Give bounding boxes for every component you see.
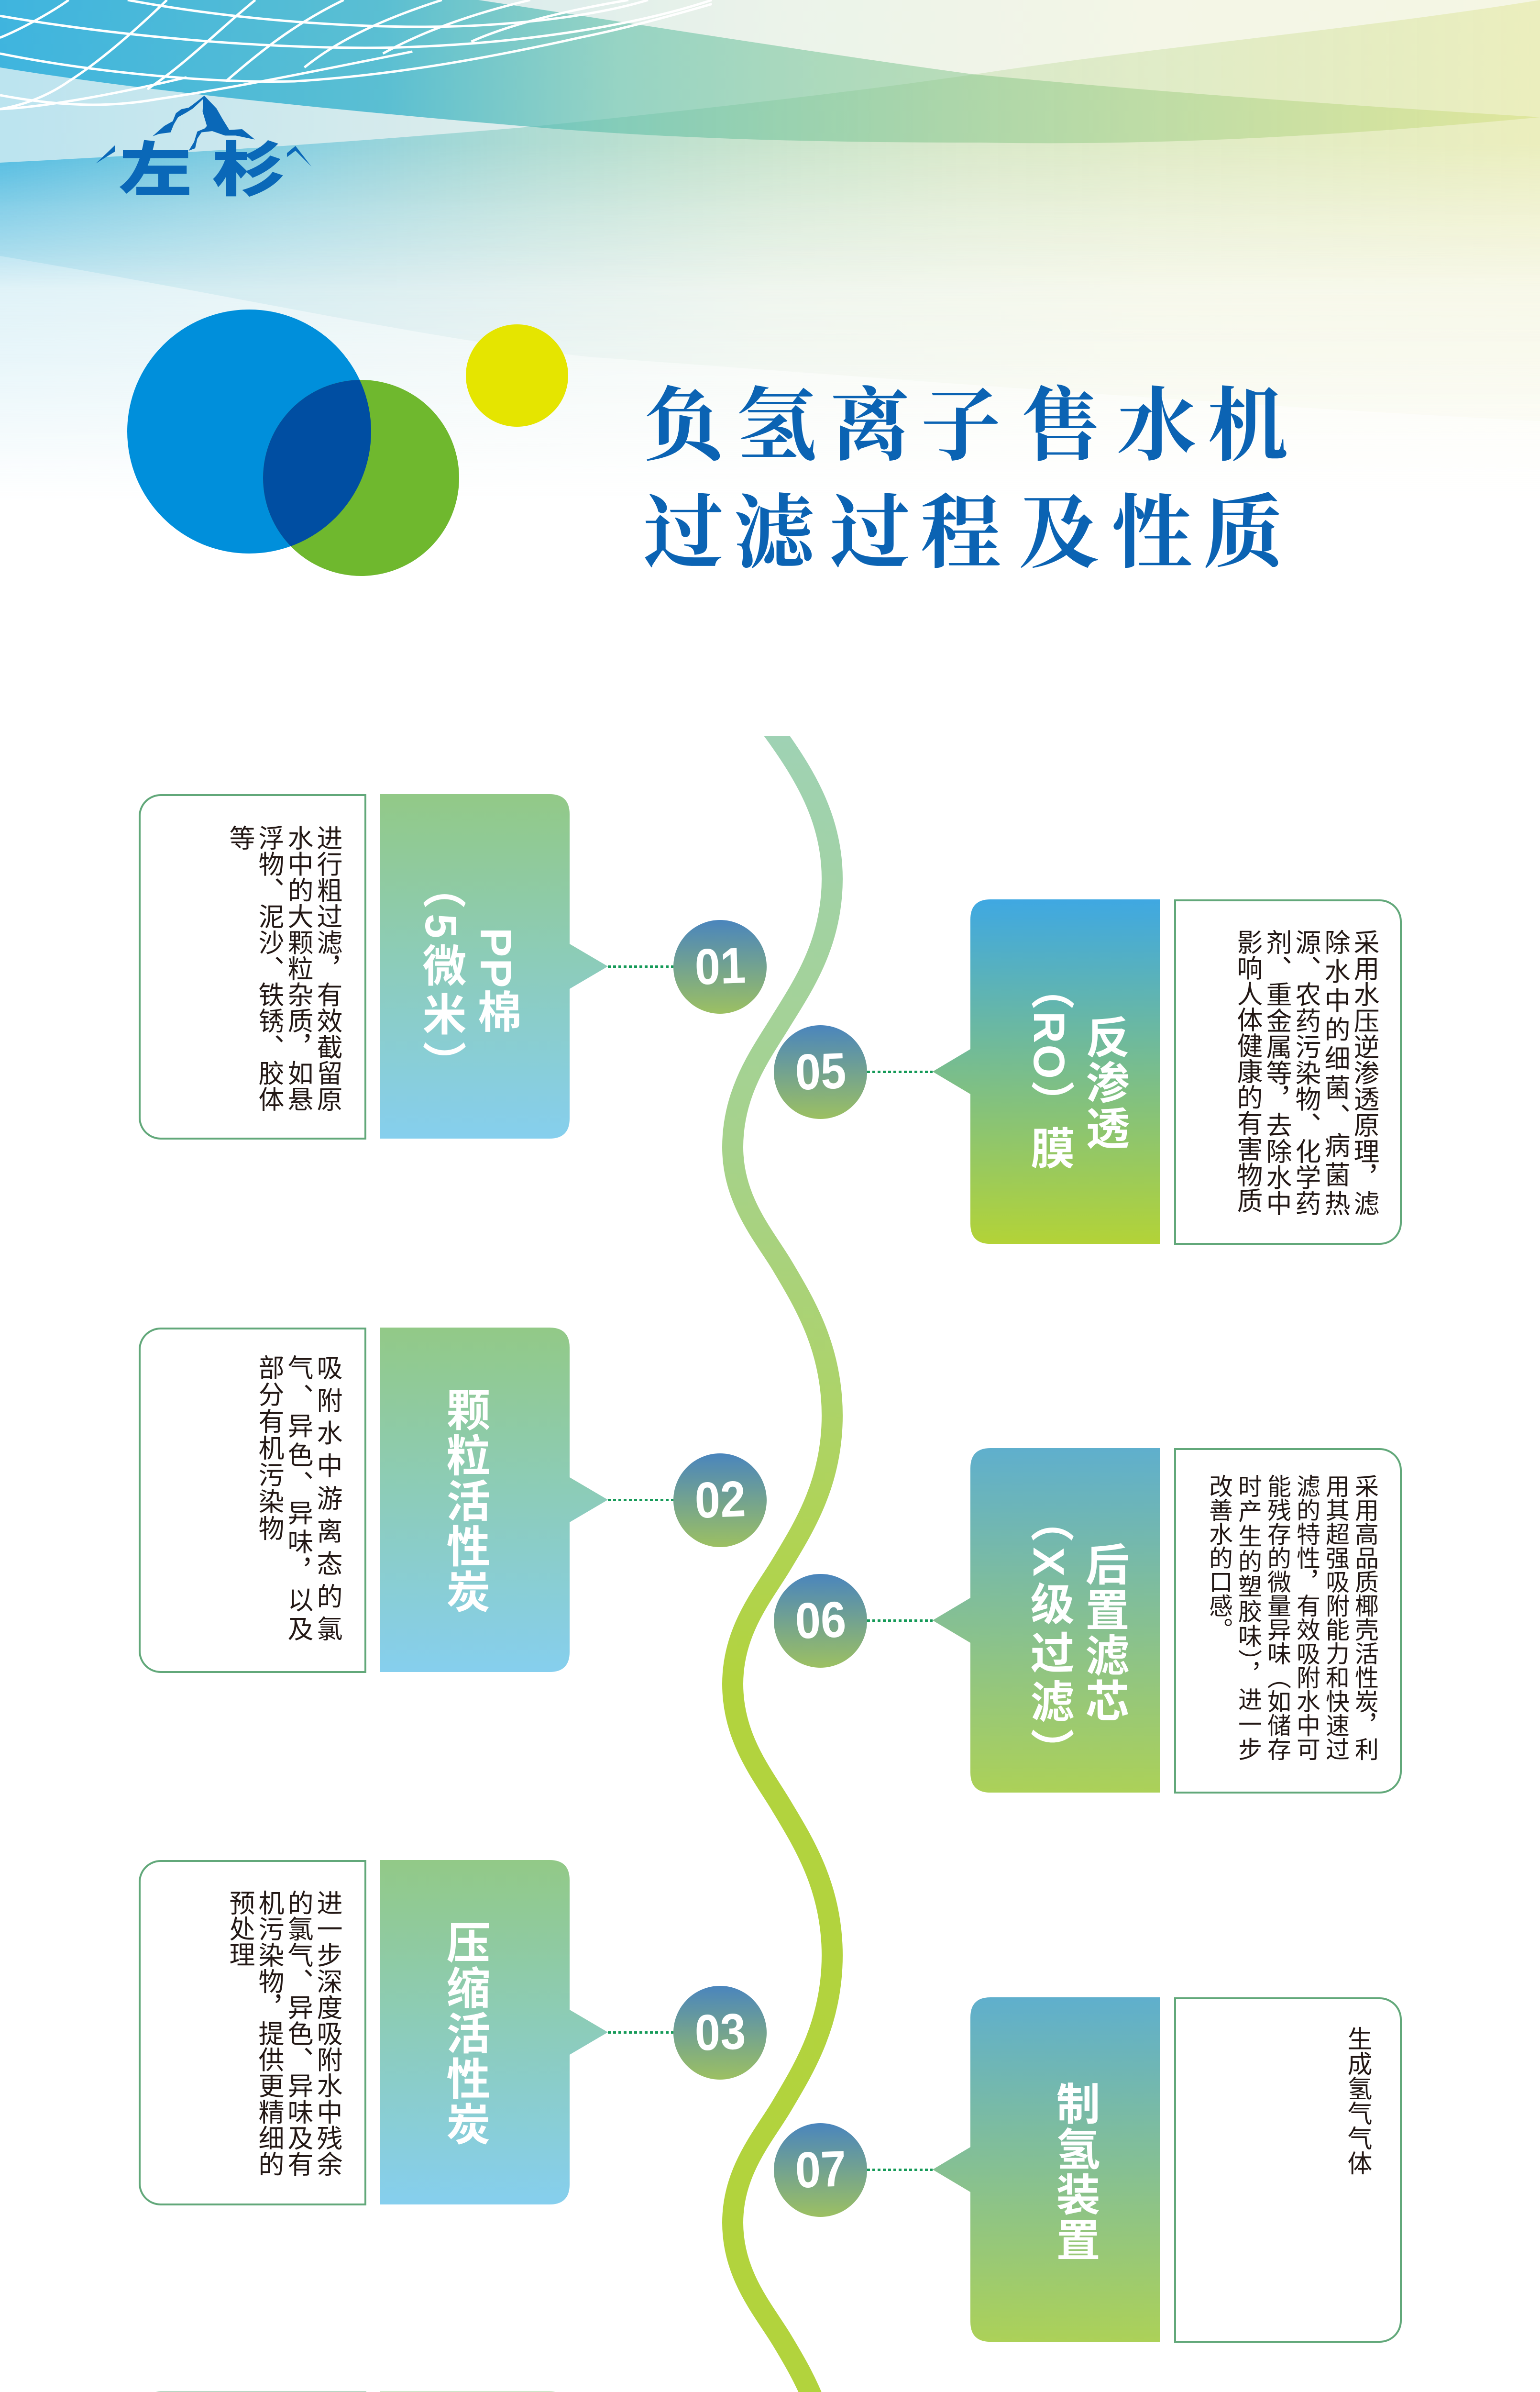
description 05: 源、农药污染物、化学药 [1291, 929, 1320, 1216]
description 02: 吸附水中游离态的氯 [313, 1354, 341, 1641]
description 01: 水中的大颗粒杂质，如悬 [284, 825, 312, 1112]
title: two-line calligraphic heading: 负氢离子售水机 [643, 382, 1288, 471]
panel: step 07 [774, 1997, 1402, 2343]
colour card 07 [933, 1997, 1160, 2342]
description 03 [139, 1890, 341, 2177]
number badge 07: 07 [794, 2140, 847, 2199]
description 02: 部分有机污染物 [254, 1354, 283, 1542]
card title 05: （RO）膜 [1024, 965, 1073, 1171]
logo: 左杉 mountain mark [0, 0, 1540, 335]
description 06: 采用高品质椰壳活性炭，利 [1352, 1474, 1378, 1761]
number badge 01 [673, 920, 767, 1014]
panel: step 03 [139, 1860, 766, 2205]
background: top and bottom waves [0, 0, 1540, 452]
description 06: 滤的特性，有效吸附水中可 [1293, 1474, 1320, 1761]
description 03: 机污染物，提供更精细的 [254, 1890, 283, 2177]
card title 06: 后置滤芯 [1079, 1542, 1128, 1724]
text box 05 [1174, 899, 1402, 1245]
description 01: 进行粗过滤，有效截留原 [313, 825, 341, 1112]
description 02: 气、异色、异味，以及 [284, 1354, 312, 1641]
description 01 [139, 825, 341, 1112]
description 03: 的氯气、异色、异味及有 [284, 1890, 312, 2177]
connector 07 [867, 2169, 933, 2171]
text box 01 [139, 794, 366, 1140]
description 06: 时产生的塑胶味），进一步 [1235, 1474, 1262, 1761]
connector 06 [867, 1619, 933, 1622]
description 05: 采用水压逆渗透原理，滤 [1350, 929, 1378, 1216]
title: two-line calligraphic heading: 过滤过程及性质 [643, 489, 1283, 578]
connector 05 [867, 1071, 933, 1073]
card title 02: 颗粒活性炭 [440, 1387, 489, 1614]
number badge 06: 06 [794, 1591, 847, 1650]
text box 03 [139, 1860, 366, 2205]
description 01: 浮物、泥沙、铁锈、胶体 [254, 825, 283, 1112]
description 03: 进一步深度吸附水中残余 [313, 1890, 341, 2177]
description 07: 生成氢气气体 [1343, 2026, 1371, 2175]
description 06: 改善水的口感。 [1206, 1474, 1232, 1641]
number badge 05 [774, 1025, 867, 1119]
card title 06: （X级过滤） [1024, 1498, 1073, 1777]
card title 05 [933, 899, 1131, 1266]
card title 01: PP棉 [471, 928, 520, 1035]
text box 02 [139, 1328, 366, 1673]
card title 01 [380, 794, 523, 1161]
number badge 02: 02 [694, 1471, 746, 1529]
card title 01: （5微米） [416, 865, 465, 1090]
card title 06 [933, 1448, 1131, 1817]
description 05: 剂、重金属等，去除水中 [1262, 929, 1291, 1216]
description 06: 能残存的微量异味（如储存 [1264, 1474, 1291, 1761]
description 05: 除水中的细菌、病菌热 [1320, 929, 1349, 1216]
decorative circles: blue, green, yellow [127, 310, 568, 576]
logo: 左杉 mountain mark: 杉 [213, 138, 285, 203]
card title 07: 制氢装置 [1050, 2081, 1099, 2263]
colour card 01 [380, 794, 608, 1139]
number badge 03: 03 [694, 2003, 746, 2061]
number badge 03 [673, 1986, 767, 2080]
panel: step 05 [774, 899, 1402, 1245]
panel: step 02 [139, 1328, 766, 1673]
description 03: 预处理 [225, 1890, 254, 1967]
description 01: 等 [225, 825, 254, 851]
connector 01 [608, 965, 673, 968]
colour card 03 [380, 1860, 608, 2204]
text box 06 [1174, 1448, 1402, 1794]
colour card 02 [380, 1328, 608, 1672]
colour card 05 [933, 899, 1160, 1244]
number badge 02 [673, 1453, 767, 1547]
text box 07 [1174, 1997, 1402, 2343]
description 06 [774, 1474, 1379, 1761]
logo: 左杉 mountain mark: 左 [120, 138, 191, 203]
description 06: 用其超强吸附能力和快速过 [1322, 1474, 1349, 1761]
number badge 07 [774, 2123, 867, 2217]
serpentine path [722, 736, 843, 2392]
description 05 [774, 929, 1378, 1216]
description 05: 影响人体健康的有害物质 [1233, 929, 1262, 1213]
card title 05: 反渗透 [1079, 1014, 1128, 1151]
colour card 06 [933, 1448, 1160, 1793]
panel: step 06 [774, 1448, 1402, 1794]
number badge 05: 05 [794, 1042, 847, 1101]
number badge 06 [774, 1574, 867, 1668]
description 02 [139, 1354, 341, 1641]
card title 03: 压缩活性炭 [440, 1919, 489, 2147]
connector 02 [608, 1499, 673, 1501]
number badge 01: 01 [694, 937, 746, 996]
panel: step 01 [139, 794, 766, 1140]
title: two-line calligraphic heading [0, 0, 1540, 622]
connector 03 [608, 2031, 673, 2034]
